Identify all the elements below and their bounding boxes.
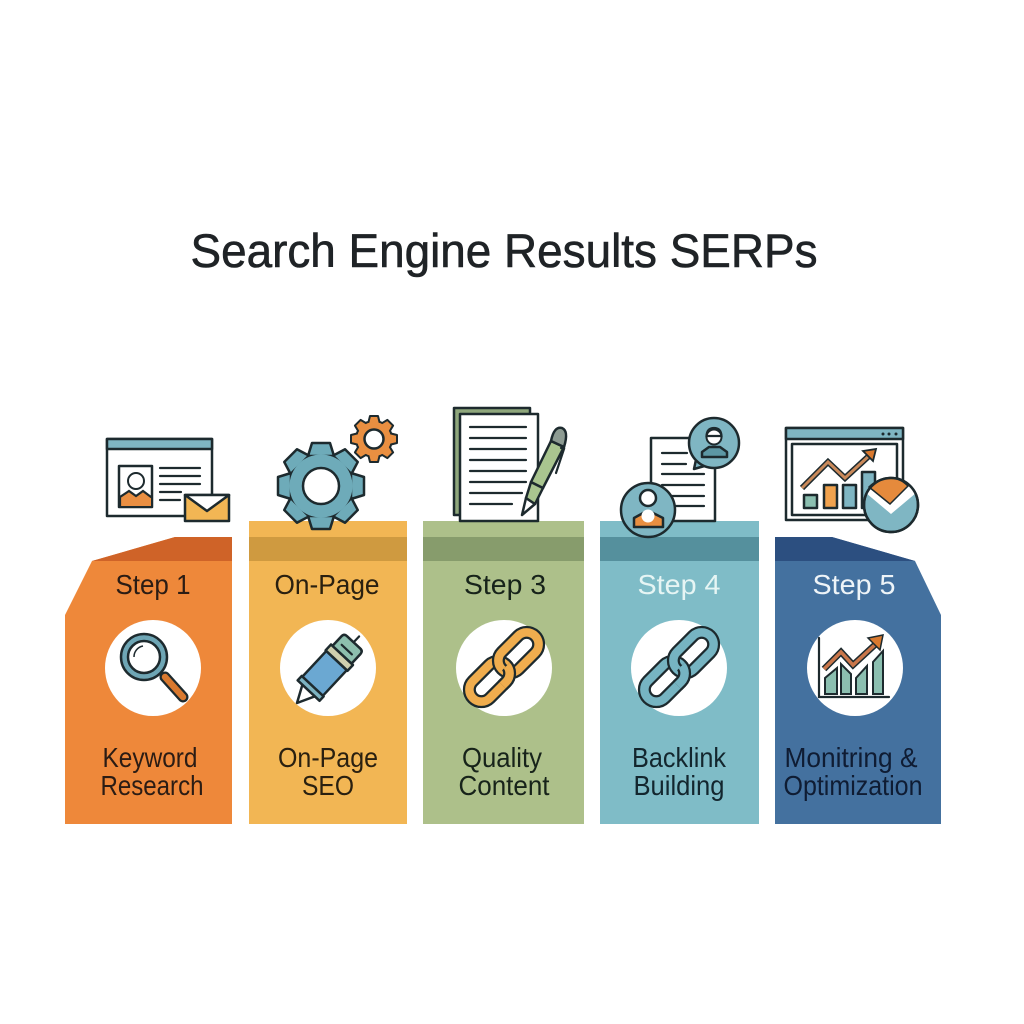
step 1 label: Research [100,770,204,801]
step 3 label: Content [458,770,550,801]
step 2 label: On-Page [278,742,378,773]
step 2 label: SEO [302,770,354,801]
panel: step 5 monitoring and optimization [775,537,941,824]
icon: analytics window with pie [786,428,918,532]
icon: pen badge [280,620,376,716]
step 5 label: Optimization [784,770,922,801]
icon: web profile and envelope [107,439,229,521]
panel: step 2 on-page seo [249,521,407,824]
bubble: upper person [689,418,739,469]
icon: gears [278,416,397,529]
step 3 label: Quality [462,742,542,773]
icon: magnifying glass badge [105,620,201,716]
step 4 label: Building [634,770,724,801]
step 1 heading: Step 1 [116,569,190,600]
panel: step 1 keyword research [65,537,232,824]
step 5 heading: Step 5 [812,569,896,600]
panel: step 4 backlink building [600,521,759,824]
bubble: lower person [621,483,675,537]
step 4 heading: Step 4 [638,569,720,600]
step 4 label: Backlink [632,742,727,773]
icon: chain link badge [631,620,727,716]
icon: document with people bubbles [621,418,739,537]
step 1 label: Keyword [102,742,198,773]
step 3 heading: Step 3 [464,569,546,600]
step 2 heading: On-Page [274,569,380,600]
panel: step 3 quality content [423,521,584,824]
title: Search Engine Results SERPs [190,224,818,277]
icon: growth chart badge [807,620,903,716]
icon: documents and pen [454,408,566,521]
icon: chain link badge [456,620,552,716]
step 5 label: Monitring & [784,742,918,773]
